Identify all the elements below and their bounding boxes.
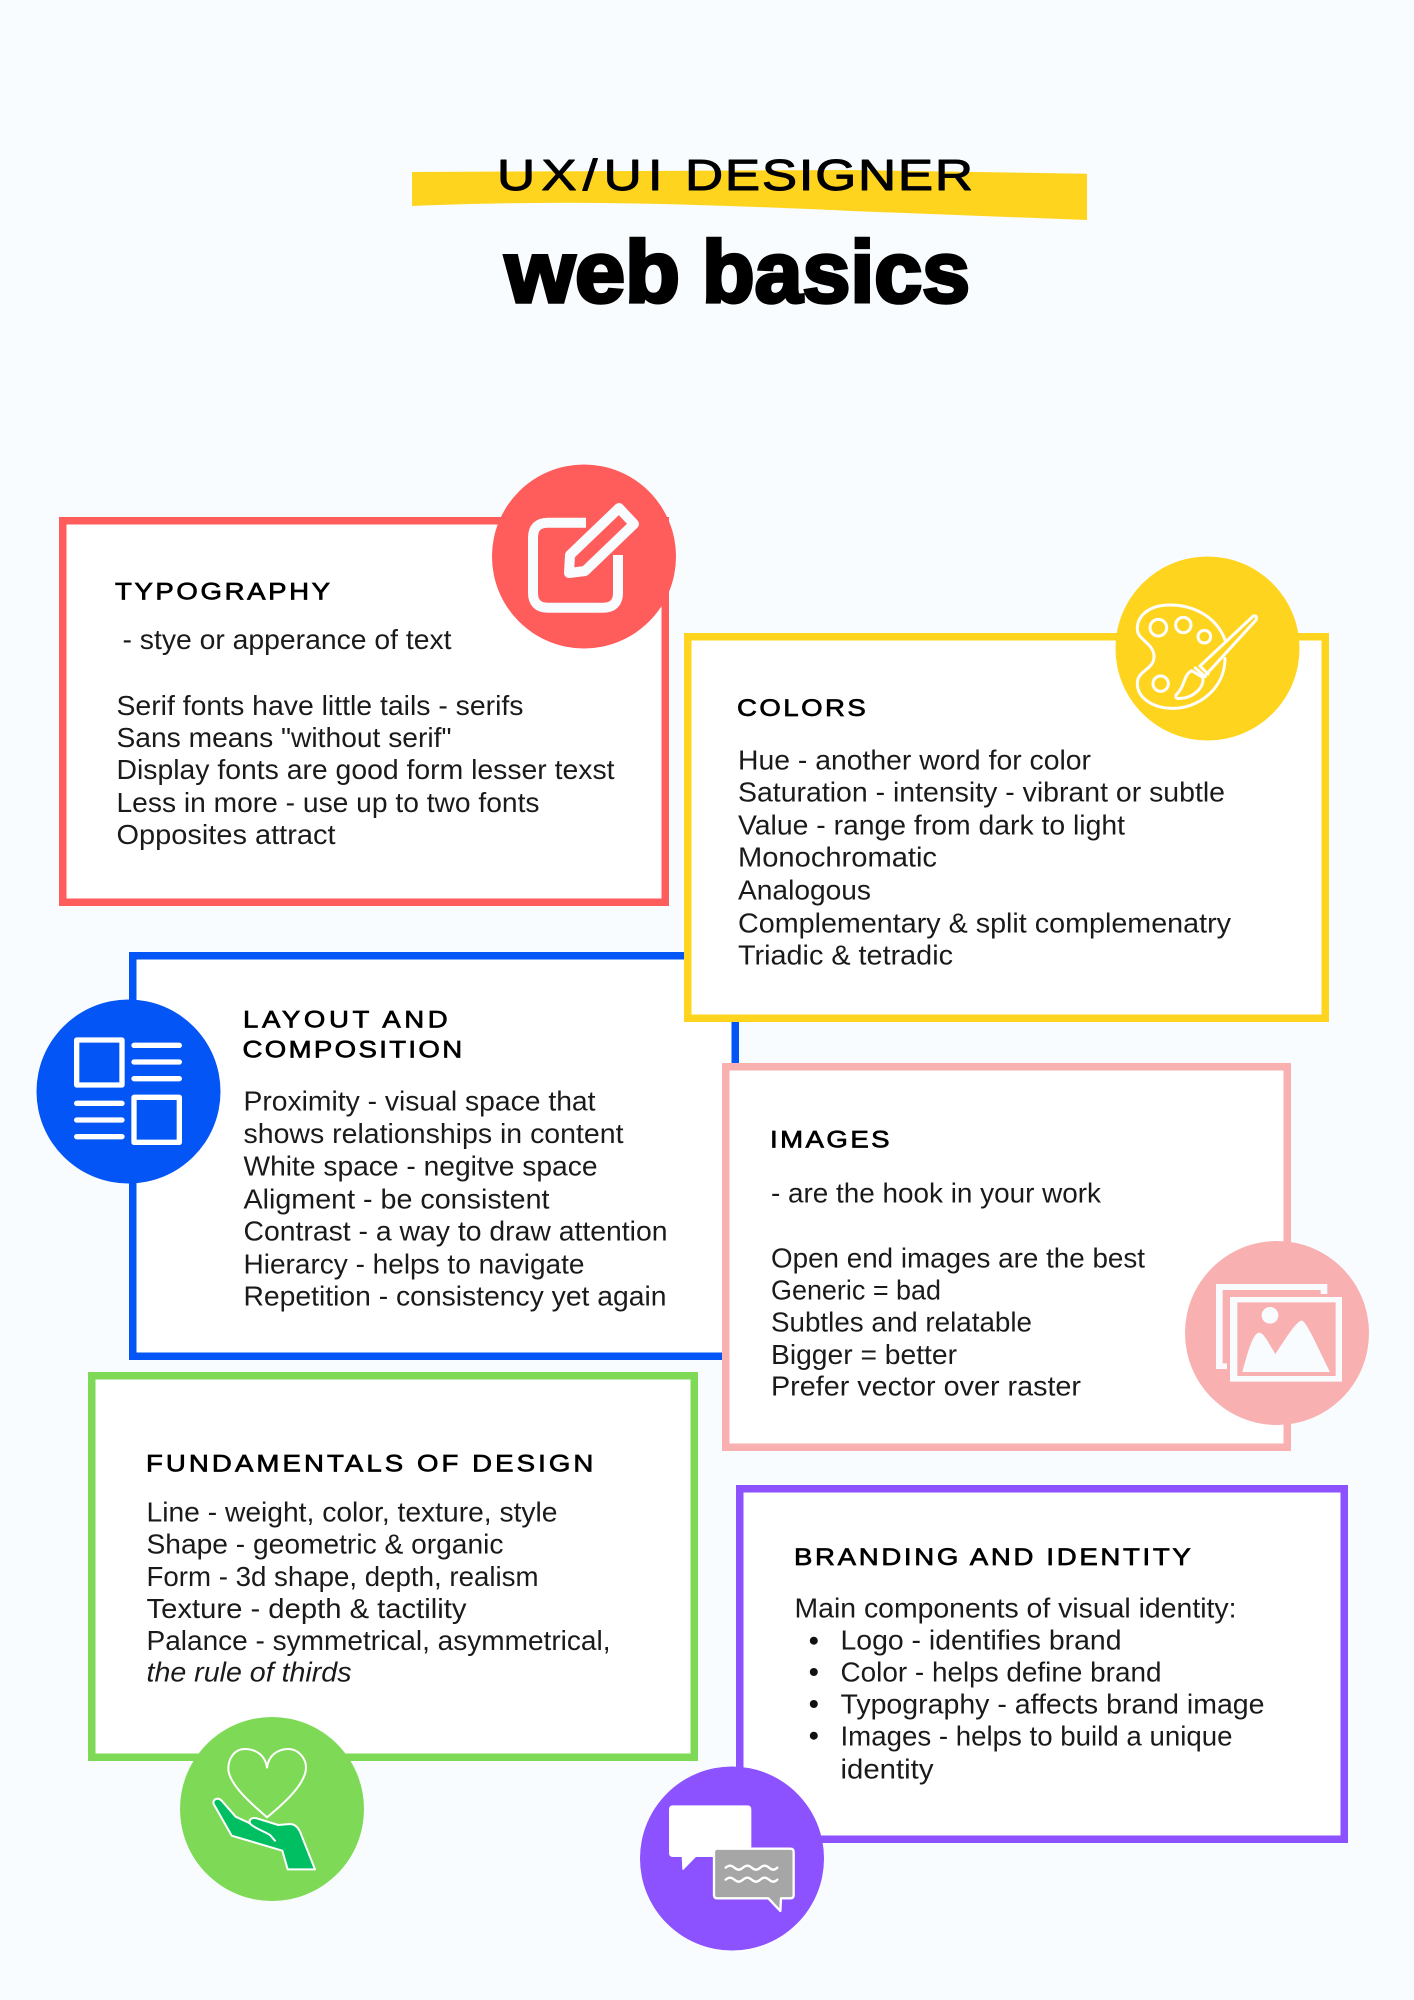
icon: page layout xyxy=(36,1000,220,1184)
yellow brush stroke xyxy=(412,170,1087,220)
icon: hand holding heart xyxy=(180,1717,364,1901)
fundamentals text: Shape - geometric & organic xyxy=(146,1529,504,1560)
subtitle: DESIGNER xyxy=(685,151,973,200)
layout text: shows relationships in content xyxy=(244,1118,624,1149)
layout text: Contrast - a way to draw attention xyxy=(244,1216,668,1247)
fundamentals text: Texture - depth & tactility xyxy=(146,1593,467,1624)
typography border xyxy=(63,521,665,902)
icon: pictures xyxy=(1185,1241,1369,1425)
colors text: Triadic & tetradic xyxy=(738,939,953,970)
layout heading: COMPOSITION xyxy=(242,1037,462,1063)
colors text: Analogous xyxy=(738,875,871,906)
colors text xyxy=(738,745,1231,970)
layout heading: LAYOUT AND xyxy=(243,1007,448,1033)
fundamentals text: the rule of thirds xyxy=(146,1657,352,1688)
branding text: Images - helps to build a unique xyxy=(840,1721,1232,1752)
main title xyxy=(504,224,970,321)
subtitle: UX/UI xyxy=(497,151,663,200)
panel: branding and identity xyxy=(640,1489,1344,1950)
typography heading: TYPOGRAPHY xyxy=(115,579,330,605)
panel: layout and composition xyxy=(36,956,735,1356)
typography text: Display fonts are good form lesser texst xyxy=(116,754,615,785)
colors heading: COLORS xyxy=(737,696,866,722)
icon: pencil on note xyxy=(492,464,676,648)
branding text: identity xyxy=(840,1753,934,1784)
colors text: Saturation - intensity - vibrant or subtle xyxy=(738,777,1225,808)
fundamentals text: Palance - symmetrical, asymmetrical, xyxy=(146,1625,610,1656)
typography text: Less in more - use up to two fonts xyxy=(116,787,540,818)
typography text xyxy=(116,624,615,850)
images text: - are the hook in your work xyxy=(771,1178,1101,1209)
branding text: Typography - affects brand image xyxy=(840,1689,1264,1720)
images text: Subtles and relatable xyxy=(771,1307,1032,1338)
layout text: Hierarcy - helps to navigate xyxy=(244,1248,584,1279)
fundamentals border xyxy=(92,1376,694,1757)
branding border xyxy=(740,1489,1344,1839)
images heading: IMAGES xyxy=(770,1127,890,1153)
typography text: Serif fonts have little tails - serifs xyxy=(116,690,524,721)
panel: images xyxy=(726,1067,1369,1447)
panel: fundamentals of design xyxy=(92,1376,694,1901)
branding heading: BRANDING AND IDENTITY xyxy=(794,1545,1191,1571)
colors border xyxy=(688,637,1325,1018)
fundamentals heading: FUNDAMENTALS OF DESIGN xyxy=(146,1451,593,1477)
images text xyxy=(771,1178,1145,1402)
subtitle xyxy=(497,151,973,200)
branding text: Color - helps define brand xyxy=(840,1657,1162,1688)
main title: basics xyxy=(702,224,970,321)
typography text: Sans means "without serif" xyxy=(116,722,452,753)
layout text: Aligment - be consistent xyxy=(244,1183,550,1214)
layout text xyxy=(244,1086,668,1312)
branding text xyxy=(794,1592,1264,1784)
images border xyxy=(726,1067,1287,1447)
fundamentals text: Form - 3d shape, depth, realism xyxy=(146,1561,538,1592)
fundamentals text xyxy=(146,1497,610,1688)
images text: Prefer vector over raster xyxy=(771,1371,1081,1402)
images text: Generic = bad xyxy=(771,1274,941,1305)
typography text: Opposites attract xyxy=(116,819,336,850)
colors text: Value - range from dark to light xyxy=(738,810,1125,841)
images text: Bigger = better xyxy=(771,1339,957,1370)
layout border xyxy=(133,956,735,1356)
main title: web xyxy=(504,224,680,321)
branding text: Logo - identifies brand xyxy=(840,1624,1122,1655)
panel: colors xyxy=(688,556,1325,1018)
layout text: Repetition - consistency yet again xyxy=(244,1281,666,1312)
icon: speech bubbles xyxy=(640,1766,824,1950)
fundamentals text: Line - weight, color, texture, style xyxy=(146,1497,558,1528)
title block xyxy=(412,151,1087,321)
colors text: Complementary & split complemenatry xyxy=(738,907,1231,938)
icon: palette and brush xyxy=(1116,556,1300,740)
layout heading xyxy=(242,1007,462,1063)
panel: typography xyxy=(63,464,676,902)
typography text: - stye or apperance of text xyxy=(122,624,452,655)
images text: Open end images are the best xyxy=(771,1243,1145,1274)
colors text: Hue - another word for color xyxy=(738,745,1091,776)
layout text: Proximity - visual space that xyxy=(244,1086,596,1117)
layout text: White space - negitve space xyxy=(244,1151,598,1182)
colors text: Monochromatic xyxy=(738,842,937,873)
branding text: Main components of visual identity: xyxy=(794,1592,1236,1623)
